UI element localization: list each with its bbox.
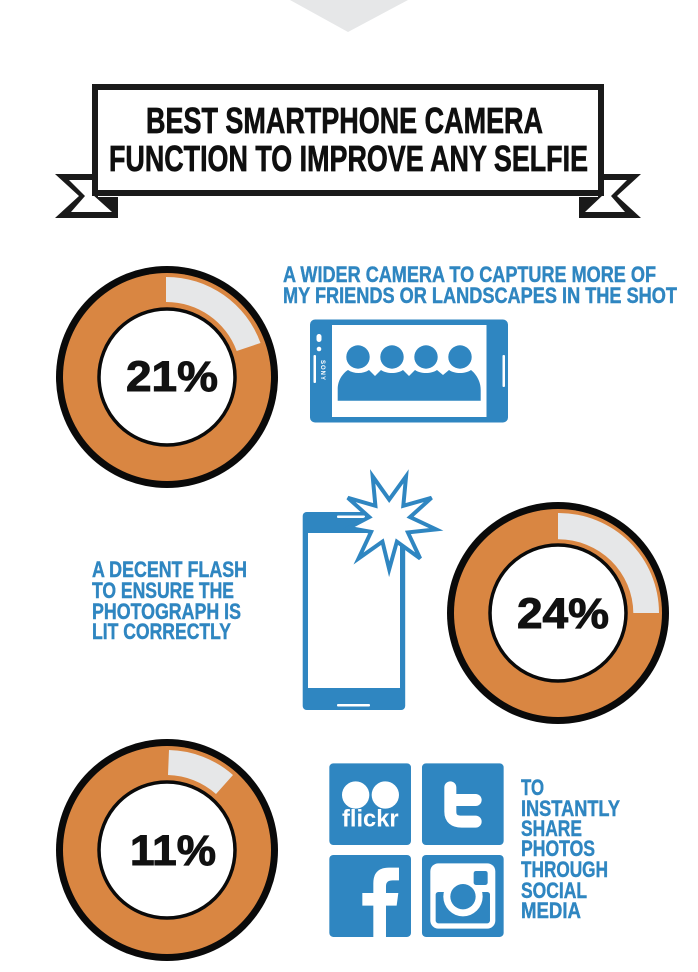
icon: portrait phone with flash — [303, 476, 436, 710]
text: share through social media: THROUGH — [521, 857, 608, 882]
text: share through social media: PHOTOS — [521, 836, 595, 861]
title text: BEST SMARTPHONE CAMERA — [146, 100, 543, 141]
title text — [109, 100, 588, 179]
title banner — [55, 87, 641, 218]
donut chart: 24% — [447, 502, 669, 724]
donut chart: 11% — [56, 739, 278, 961]
text: decent flash: PHOTOGRAPH IS — [92, 599, 241, 624]
text: share through social media: MEDIA — [521, 898, 581, 923]
text: share through social media: TO — [521, 775, 544, 800]
percentage: 21%: 21% — [126, 353, 218, 401]
icon: facebook — [329, 855, 411, 937]
text: share through social media: INSTANTLY — [521, 796, 620, 821]
icon: twitter — [422, 763, 504, 845]
icon: landscape phone with group of people — [310, 320, 508, 422]
percentage: 11%: 11% — [130, 827, 216, 875]
donut chart: 21% — [56, 266, 278, 488]
icon: flickr: flickr — [342, 806, 399, 833]
text: share through social media — [521, 775, 620, 923]
social media icons — [329, 763, 504, 937]
text: share through social media: SOCIAL — [521, 878, 587, 903]
text: decent flash: A DECENT FLASH — [92, 557, 247, 582]
decorative chevron at top — [290, 0, 408, 32]
flash burst — [348, 476, 436, 569]
banner right ribbon tail — [579, 174, 641, 218]
people silhouettes — [338, 345, 481, 401]
percentage: 24%: 24% — [517, 590, 609, 638]
text: wider camera — [283, 262, 677, 308]
text: decent flash: TO ENSURE THE — [92, 578, 234, 603]
icon: instagram — [422, 855, 504, 937]
icon: flickr — [329, 763, 411, 845]
icon: landscape phone with group of people: SONY — [319, 360, 325, 380]
banner frame — [95, 87, 601, 193]
text: decent flash: LIT CORRECTLY — [92, 619, 231, 644]
text: share through social media: SHARE — [521, 816, 582, 841]
text: decent flash — [92, 557, 247, 644]
banner left ribbon tail — [55, 174, 118, 218]
